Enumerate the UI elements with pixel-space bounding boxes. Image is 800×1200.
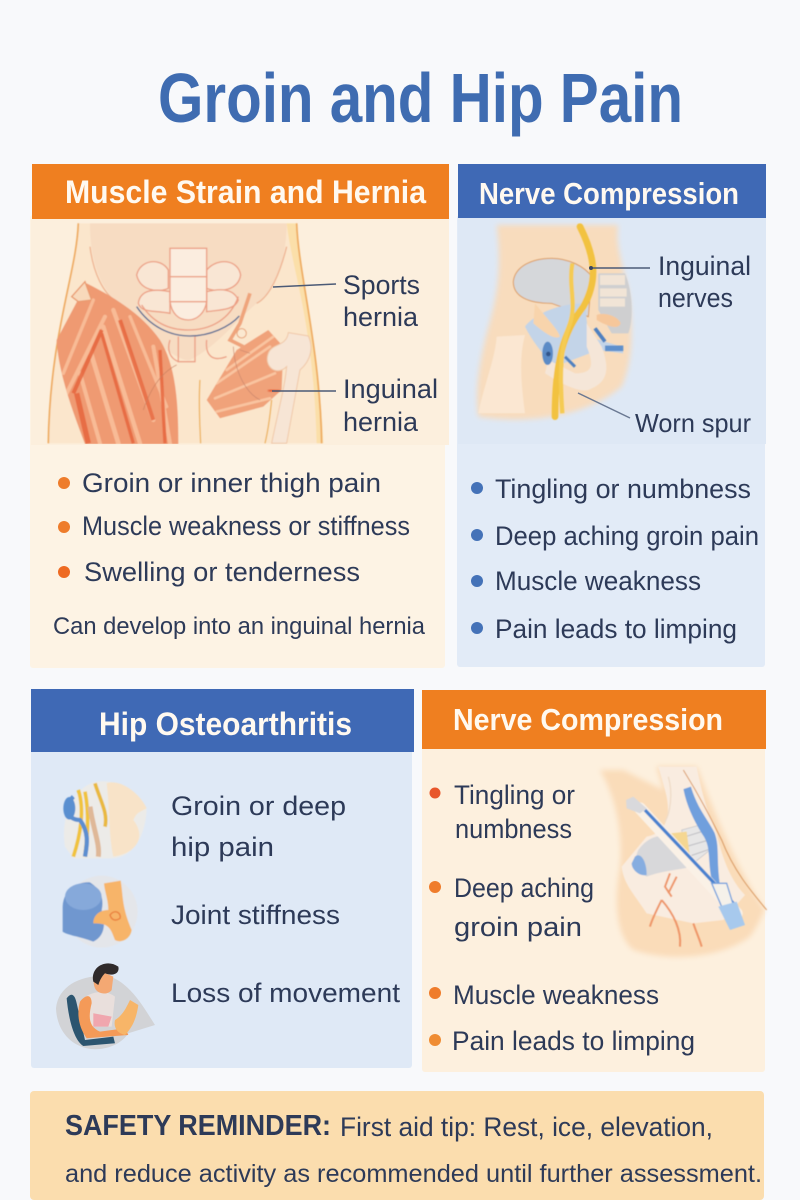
symptom list: Tingling or	[454, 780, 575, 810]
panel heading: nerve compression: Nerve Compression	[453, 702, 723, 737]
safety reminder banner: and reduce activity as recommended until further assessment.	[65, 1160, 762, 1188]
symptom list: Swelling or tenderness	[84, 557, 360, 587]
symptom list	[429, 780, 695, 1056]
title: Groin and Hip Pain	[158, 59, 683, 137]
symptom list: groin pain	[454, 912, 582, 942]
symptom list: Muscle weakness	[453, 980, 659, 1010]
callout: inguinal nerves: nerves	[658, 283, 733, 313]
panel heading: nerve compression	[422, 690, 766, 749]
label: groin or deep hip pain: Groin or deep	[171, 791, 346, 821]
panel heading: muscle strain and hernia	[32, 164, 449, 219]
label: groin or deep hip pain: hip pain	[171, 832, 274, 862]
safety reminder banner: SAFETY REMINDER:	[65, 1110, 331, 1142]
callout: worn spur	[578, 393, 751, 438]
panel: muscle strain and hernia	[30, 164, 449, 668]
callout: inguinal nerves	[589, 251, 751, 313]
callout: inguinal hernia	[272, 374, 438, 437]
femur	[267, 333, 311, 443]
callout: sports hernia	[273, 270, 420, 332]
symptom list: Tingling or numbness	[495, 474, 751, 504]
symptom list: Muscle weakness or stiffness	[82, 511, 410, 541]
symptom list: numbness	[455, 814, 572, 844]
panel heading: hip osteoarthritis: Hip Osteoarthritis	[99, 706, 352, 742]
callout: sports hernia: hernia	[343, 302, 419, 332]
symptom list	[58, 468, 410, 587]
callout: inguinal hernia: Inguinal	[343, 374, 438, 404]
note: inguinal hernia risk: Can develop into an inguinal hernia	[53, 613, 426, 640]
callout: inguinal hernia: hernia	[343, 407, 419, 437]
panel heading: nerve compression	[458, 164, 766, 218]
left thigh muscle	[57, 282, 178, 444]
safety reminder banner: First aid tip: Rest, ice, elevation,	[340, 1112, 713, 1142]
label: joint stiffness: Joint stiffness	[171, 900, 340, 930]
symptom list: Deep aching	[454, 873, 594, 903]
panel heading: hip osteoarthritis	[31, 689, 414, 752]
illustration: hip joint cross-section	[600, 767, 767, 957]
symptom list: Deep aching groin pain	[495, 521, 759, 551]
label: groin or deep hip pain	[171, 791, 346, 862]
panel heading: muscle strain and hernia: Muscle Strain and Hernia	[65, 174, 426, 210]
icon: person with limited movement	[56, 963, 155, 1049]
icon: hip joint with nerves	[63, 781, 147, 858]
panel: nerve compression, lower	[422, 690, 767, 1072]
panel: hip osteoarthritis	[31, 689, 414, 1068]
right thigh muscle	[207, 293, 283, 418]
symptom list: Pain leads to limping	[495, 614, 737, 644]
panel heading: nerve compression: Nerve Compression	[479, 176, 739, 211]
illustration: pelvis and thigh muscles	[48, 223, 323, 444]
symptom list: Pain leads to limping	[452, 1026, 695, 1056]
illustration: inguinal nerves	[477, 225, 632, 419]
callout: worn spur: Worn spur	[635, 408, 751, 438]
icon: stiff joint	[63, 876, 138, 948]
panel: nerve compression, top	[457, 164, 766, 667]
safety reminder banner	[30, 1091, 764, 1200]
symptom list: Muscle weakness	[495, 566, 701, 596]
label: loss of movement: Loss of movement	[171, 978, 401, 1008]
symptom list: Groin or inner thigh pain	[82, 468, 381, 498]
callout: sports hernia: Sports	[343, 270, 420, 300]
symptom list	[471, 474, 759, 644]
callout: inguinal nerves: Inguinal	[658, 251, 751, 281]
